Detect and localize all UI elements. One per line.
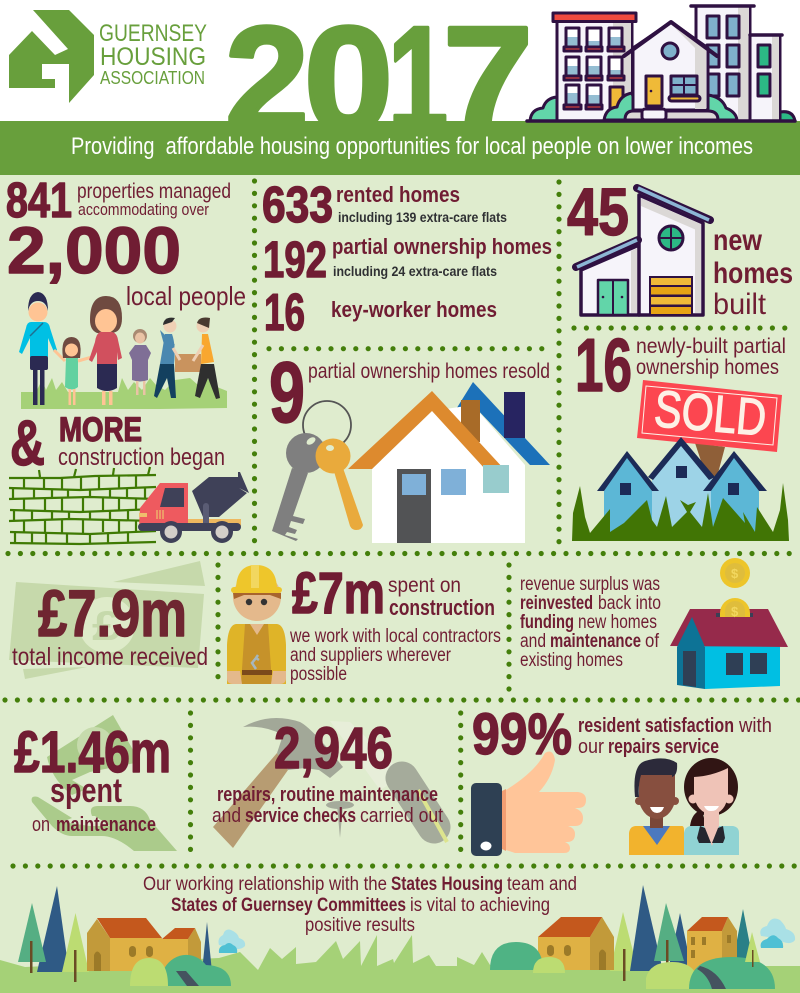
panel: revenue surplus: reinvested <box>520 593 593 614</box>
panel: maintenance spend: spent <box>50 772 122 810</box>
logo wordmark <box>99 20 207 88</box>
woman <box>89 296 122 405</box>
panel: homes breakdown <box>262 176 552 342</box>
two men carrying a box <box>154 318 220 399</box>
icon: two residents <box>629 758 739 855</box>
panel: homes resold: partial ownership homes resold <box>308 360 550 383</box>
logo mark <box>9 10 94 103</box>
panel: new homes built: 45 <box>567 175 629 250</box>
woman <box>684 758 739 855</box>
right houses <box>538 917 737 975</box>
year title: 7 <box>443 0 533 163</box>
panel: new homes built <box>567 175 793 321</box>
right trees <box>610 885 755 981</box>
left hills and road <box>130 955 231 986</box>
right hills and road <box>490 942 775 989</box>
panel: revenue surplus: existing homes <box>520 650 623 671</box>
panel: homes breakdown: partial ownership homes <box>332 234 552 259</box>
panel: properties managed: 2,000 <box>7 213 181 287</box>
panel: revenue surplus <box>520 574 661 671</box>
icon: banknotes <box>9 561 205 679</box>
panel: resident satisfaction: 99% <box>472 702 572 767</box>
footer statement: Our working relationship with the <box>143 874 387 895</box>
logo <box>9 10 207 103</box>
icon: brick wall <box>9 467 156 544</box>
panel: total income <box>9 561 208 679</box>
footer scene <box>0 885 800 993</box>
panel: properties managed: accommodating over <box>78 200 209 219</box>
panel: resident satisfaction <box>472 702 772 767</box>
panel: homes breakdown: 16 <box>264 284 305 342</box>
icon: sold sign with houses <box>572 380 789 541</box>
panel: homes breakdown: 633 <box>262 176 333 233</box>
left houses <box>87 918 201 971</box>
icon: house money box with coins: $ <box>731 566 739 581</box>
left cloud <box>218 930 245 953</box>
left trees <box>18 886 212 982</box>
panel: resident satisfaction: repairs service <box>608 736 719 758</box>
panel: newly built partial ownership homes: newly-built partial <box>636 335 786 358</box>
panel: construction: construction began <box>58 444 225 471</box>
panel: spent on construction: construction <box>389 595 495 620</box>
icon: cement mixer truck <box>138 472 249 543</box>
panel: spent on construction: and suppliers wherever <box>290 645 452 666</box>
man <box>19 292 65 405</box>
panel: properties managed: 841 <box>6 174 72 228</box>
panel: spent on construction: £7m <box>292 561 385 626</box>
panel: revenue surplus: maintenance <box>550 631 641 652</box>
panel: homes resold <box>269 345 550 441</box>
panel: properties managed: properties managed <box>77 180 231 203</box>
panel: newly built partial ownership homes <box>575 323 786 407</box>
panel: revenue surplus: back into <box>598 593 661 614</box>
icon: thumbs up <box>471 752 586 856</box>
panel: maintenance spend: on <box>32 814 50 836</box>
grey key <box>272 433 326 541</box>
icon: house money box with coins <box>670 558 788 689</box>
icon: hand holding money <box>32 715 177 851</box>
girl <box>62 337 92 405</box>
year title <box>225 0 533 163</box>
footer statement: States of Guernsey Committees <box>171 895 406 916</box>
panel: newly built partial ownership homes: 16 <box>575 323 632 407</box>
footer statement: States Housing <box>391 874 503 895</box>
panel: homes breakdown: rented homes <box>336 182 460 207</box>
panel: maintenance spend: £1.46m <box>14 720 171 785</box>
footer statement: is vital to achieving <box>410 895 550 916</box>
panel: new homes built: built <box>713 288 767 321</box>
footer statement: team and <box>507 874 577 895</box>
panel: newly built partial ownership homes: ownership homes <box>636 356 779 379</box>
panel: revenue surplus: revenue surplus was <box>520 574 660 595</box>
banner <box>0 121 800 175</box>
panel: homes breakdown: including 24 extra-care flats <box>333 263 497 279</box>
panel: total income: £7.9m <box>38 576 187 650</box>
panel: homes breakdown: key-worker homes <box>331 297 497 322</box>
year title: 1 <box>388 0 448 163</box>
panel: repairs carried out: 2,946 <box>274 716 393 781</box>
footer statement: positive results <box>305 915 415 936</box>
icon: modern house <box>576 188 710 315</box>
panel: revenue surplus: and <box>520 631 546 652</box>
man <box>629 758 684 855</box>
panel: resident satisfaction: resident satisfaction <box>578 715 734 737</box>
panel: properties managed <box>6 174 246 311</box>
panel: construction: & <box>10 407 45 479</box>
panel: repairs carried out: repairs, routine maintenance <box>217 784 438 806</box>
panel: maintenance spend <box>14 715 177 851</box>
panel: repairs carried out: carried out <box>360 805 443 827</box>
panel: new homes built: new <box>713 224 763 257</box>
panel: spent on construction: spent on <box>388 574 461 597</box>
panel: properties managed: local people <box>126 281 246 311</box>
panel: revenue surplus: funding <box>520 612 574 633</box>
panel: homes breakdown: 192 <box>263 231 327 288</box>
icon: house money box with coins: $ <box>731 604 739 619</box>
icon: construction worker <box>227 565 286 684</box>
icon: hammer, nail and tool <box>213 718 447 848</box>
icon: banknotes: £ <box>92 602 120 649</box>
panel: revenue surplus: of <box>645 631 660 652</box>
footer statement <box>143 874 577 936</box>
logo wordmark: GUERNSEY <box>99 20 207 47</box>
yellow key <box>316 438 363 530</box>
illustration: family and neighbours <box>19 292 227 409</box>
icon: city buildings <box>527 6 795 121</box>
panel: spent on construction: possible <box>290 664 347 685</box>
year title: 0 <box>304 0 393 163</box>
year title: 2 <box>225 0 309 163</box>
panel: resident satisfaction: our <box>578 736 604 758</box>
panel: repairs carried out: and <box>212 805 241 827</box>
panel: spent on construction <box>289 561 501 685</box>
panel: resident satisfaction: with <box>738 715 772 737</box>
icon: house with blue and orange roofs <box>348 382 550 543</box>
panel: spent on construction: we work with local contractors <box>289 626 501 647</box>
panel: repairs carried out: service checks <box>245 805 356 827</box>
icon: keys <box>272 401 363 541</box>
logo wordmark: HOUSING <box>100 43 206 71</box>
panel: construction <box>10 407 225 479</box>
panel: construction: MORE <box>59 411 142 449</box>
panel: homes resold: 9 <box>269 345 305 441</box>
older woman <box>129 329 151 395</box>
panel: homes breakdown: including 139 extra-care flats <box>338 209 507 225</box>
panel: maintenance spend: maintenance <box>56 814 156 836</box>
sold sign: SOLD <box>652 380 769 448</box>
panel: revenue surplus: new homes <box>578 612 657 633</box>
right small tree and cloud <box>745 918 795 967</box>
logo wordmark: ASSOCIATION <box>100 68 205 88</box>
panel: repairs carried out <box>212 716 443 827</box>
panel: total income: total income received <box>12 643 208 671</box>
